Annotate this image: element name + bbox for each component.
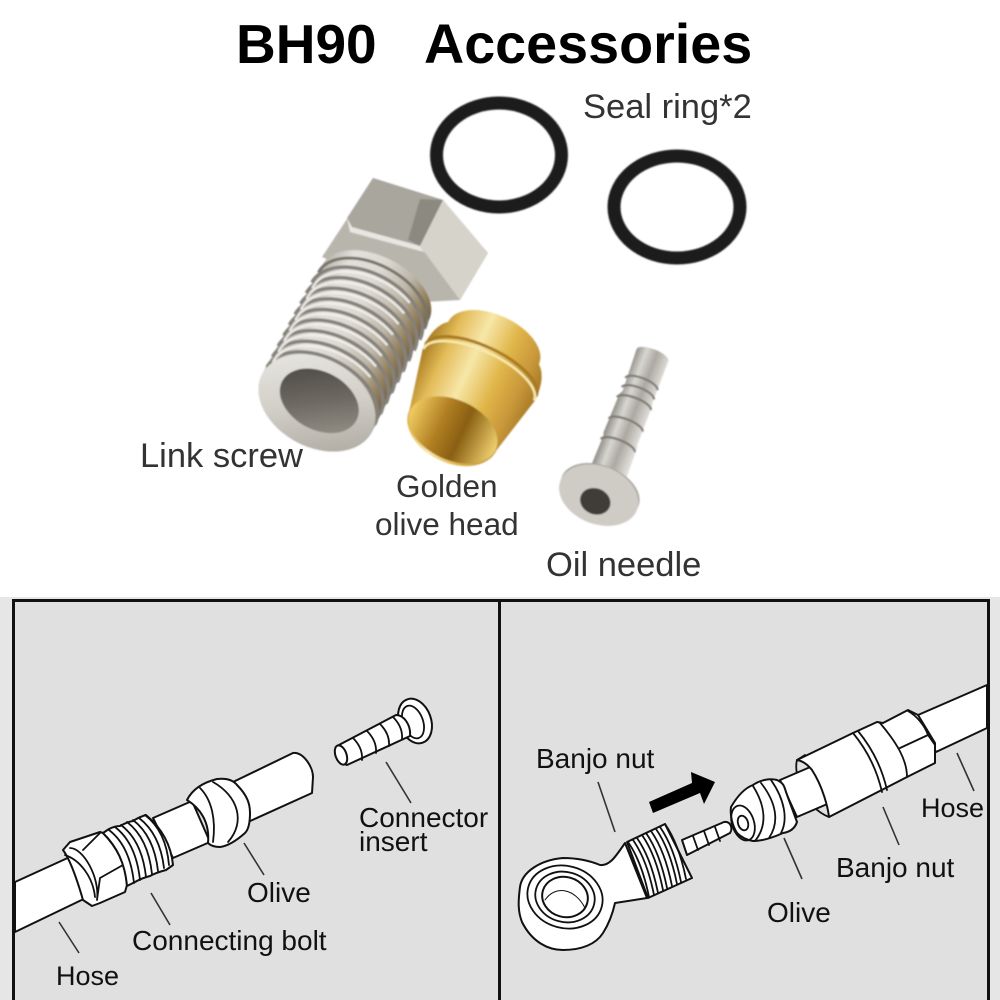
- hose left: [15, 856, 92, 932]
- label: hose: Hose: [56, 961, 119, 991]
- banjo fitting: [519, 824, 692, 950]
- photo: golden olive head: [383, 291, 562, 486]
- label: connector insert: Connector: [359, 802, 488, 833]
- panel: diagram background: [0, 597, 1000, 1000]
- label: olive right: Olive: [767, 897, 831, 928]
- panel: connecting bolt diagram: [15, 694, 488, 991]
- connector insert: [332, 694, 438, 766]
- label: connecting bolt: Connecting bolt: [132, 925, 327, 956]
- olive: [187, 753, 313, 847]
- label: banjo nut bottom: Banjo nut: [836, 852, 955, 883]
- photo: oil needle: [550, 335, 693, 537]
- title: Accessories: [424, 13, 752, 75]
- title: BH90: [236, 13, 377, 75]
- label: seal ring: Seal ring*2: [583, 88, 752, 126]
- label: oil needle: Oil needle: [546, 546, 701, 584]
- arrow: [649, 772, 715, 813]
- pin: [682, 822, 731, 855]
- leader lines: [598, 753, 974, 879]
- label: hose right: Hose: [921, 793, 984, 823]
- middle tube: [153, 801, 210, 858]
- photo: link screw: [242, 178, 488, 471]
- photo: seal rings: [436, 103, 740, 258]
- panel: banjo nut diagram: [519, 685, 987, 950]
- label: golden olive head: Golden: [396, 468, 498, 504]
- label: olive: Olive: [247, 877, 311, 908]
- olive right: [727, 779, 797, 844]
- label: link screw: Link screw: [140, 437, 303, 475]
- connecting bolt: [63, 815, 173, 906]
- banjo nut sleeve: [780, 685, 987, 817]
- label: banjo nut top: Banjo nut: [536, 743, 655, 774]
- leader lines: [59, 762, 411, 953]
- label: connector insert: insert: [359, 826, 428, 857]
- label: golden olive head: olive head: [375, 506, 519, 542]
